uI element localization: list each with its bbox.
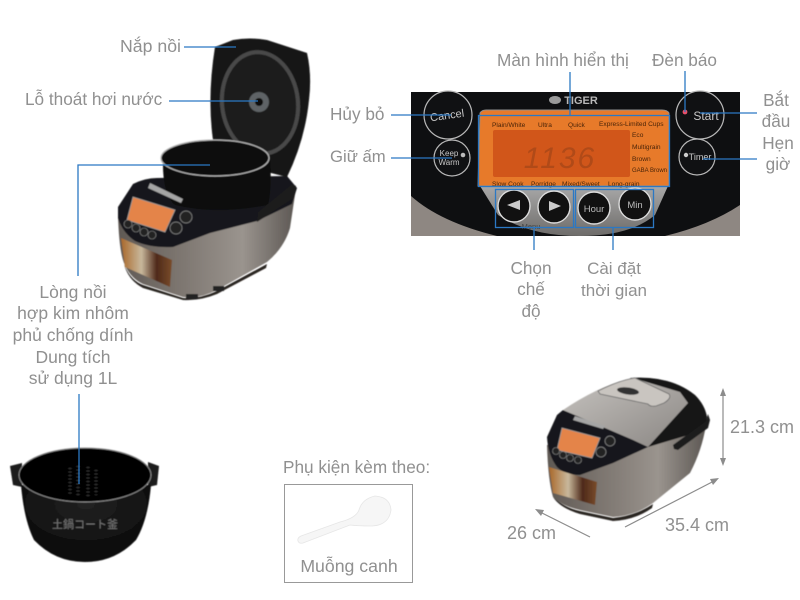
icon: ladle — [298, 496, 391, 543]
label: steam vent: Lỗ thoát hơi nước — [25, 89, 163, 109]
display highlight — [478, 116, 670, 186]
dimension arrow: width — [535, 509, 590, 537]
button: start: Start — [693, 109, 719, 123]
LCD labels: Slow Cook — [492, 181, 524, 188]
callout line: keep warm — [391, 157, 452, 159]
LCD digits: 1136 — [524, 142, 596, 175]
button: min: Min — [627, 200, 643, 211]
button: timer: Timer — [689, 152, 711, 162]
callout line: indicator — [684, 71, 686, 112]
menu label: Menu — [522, 222, 540, 231]
callout line: start — [700, 112, 757, 114]
label: select mode: Chọn — [510, 258, 552, 278]
LCD labels: Quick — [568, 122, 586, 129]
label: inner pot: phủ chống dính — [13, 325, 133, 345]
label: lid: Nắp nồi — [120, 35, 181, 56]
callout line: time — [612, 228, 614, 250]
callout line: lid — [184, 46, 236, 48]
callout line: inner pot lower — [78, 394, 80, 484]
LCD labels: Express-Limited Cups — [599, 121, 664, 128]
LCD labels — [492, 121, 667, 188]
LCD labels: GABA Brown — [632, 168, 667, 174]
label: height: 21.3 cm — [730, 417, 794, 437]
dimension arrow: length — [625, 478, 719, 527]
label: inner pot: hợp kim nhôm — [17, 303, 129, 323]
callout line: menu — [533, 228, 535, 250]
button: keep warm — [434, 140, 470, 176]
callout line: cancel — [391, 114, 451, 116]
button: cancel — [424, 91, 472, 139]
button: timer — [679, 139, 715, 175]
label: select mode: chế — [517, 279, 545, 299]
LCD labels: Mixed/Sweet — [562, 181, 600, 188]
button: keep warm: Keep — [440, 149, 459, 158]
photo: inner pot — [10, 448, 159, 562]
time buttons highlight — [576, 190, 654, 228]
label: display: Màn hình hiển thị — [497, 50, 629, 70]
button: hour: Hour — [584, 204, 604, 215]
callout line: display — [569, 72, 571, 115]
label: timer: Hẹn — [762, 133, 794, 153]
dimension arrow: height — [720, 388, 726, 466]
label: inner pot: sử dụng 1L — [29, 368, 118, 388]
callout line: inner pot — [78, 165, 210, 276]
photo: closed rice cooker — [547, 378, 710, 521]
button: right arrow — [538, 191, 570, 223]
photo: open rice cooker — [118, 38, 310, 300]
callout line: timer — [703, 158, 757, 160]
label: inner pot: Lòng nồi — [39, 282, 107, 302]
label: length: 35.4 cm — [665, 515, 729, 535]
LCD labels: Eco — [632, 132, 644, 139]
label: inner pot: Dung tích — [36, 347, 110, 367]
button: keep warm: Warm — [438, 158, 460, 167]
button: hour — [578, 192, 610, 224]
label: ladle: Muỗng canh — [300, 555, 398, 576]
label: set time: thời gian — [581, 281, 647, 300]
brand logo: TIGER — [564, 95, 598, 107]
menu buttons highlight — [496, 190, 574, 228]
label: cancel: Hủy bỏ — [330, 104, 384, 124]
LCD labels: Plain/White — [492, 122, 526, 129]
button: min — [619, 188, 651, 220]
label: keep warm: Giữ ấm — [330, 147, 386, 166]
label: select mode: độ — [521, 301, 541, 321]
accessory box: ladle — [284, 484, 412, 582]
label: start: Bắt — [763, 90, 789, 110]
brand logo — [549, 95, 598, 107]
label: timer: giờ — [766, 154, 790, 174]
LCD labels: Long-grain — [608, 181, 640, 188]
photo: control panel close-up — [411, 91, 740, 236]
label: set time: Cài đặt — [587, 259, 641, 278]
callout line: steam vent — [169, 100, 258, 102]
LCD labels: Brown — [632, 156, 651, 163]
button: start — [676, 91, 724, 139]
button: left arrow — [498, 190, 530, 222]
label: width: 26 cm — [507, 523, 556, 543]
label: accessories: Phụ kiện kèm theo: — [283, 457, 430, 477]
LCD labels: Ultra — [538, 122, 552, 129]
LCD labels: Porridge — [531, 181, 556, 188]
LCD labels: Multigrain — [632, 144, 661, 151]
label: start: đầu — [762, 111, 790, 131]
button: cancel: Cancel — [429, 108, 465, 124]
photo: inner pot: 土鍋コート釜 — [52, 517, 118, 531]
label: indicator: Đèn báo — [652, 50, 717, 70]
